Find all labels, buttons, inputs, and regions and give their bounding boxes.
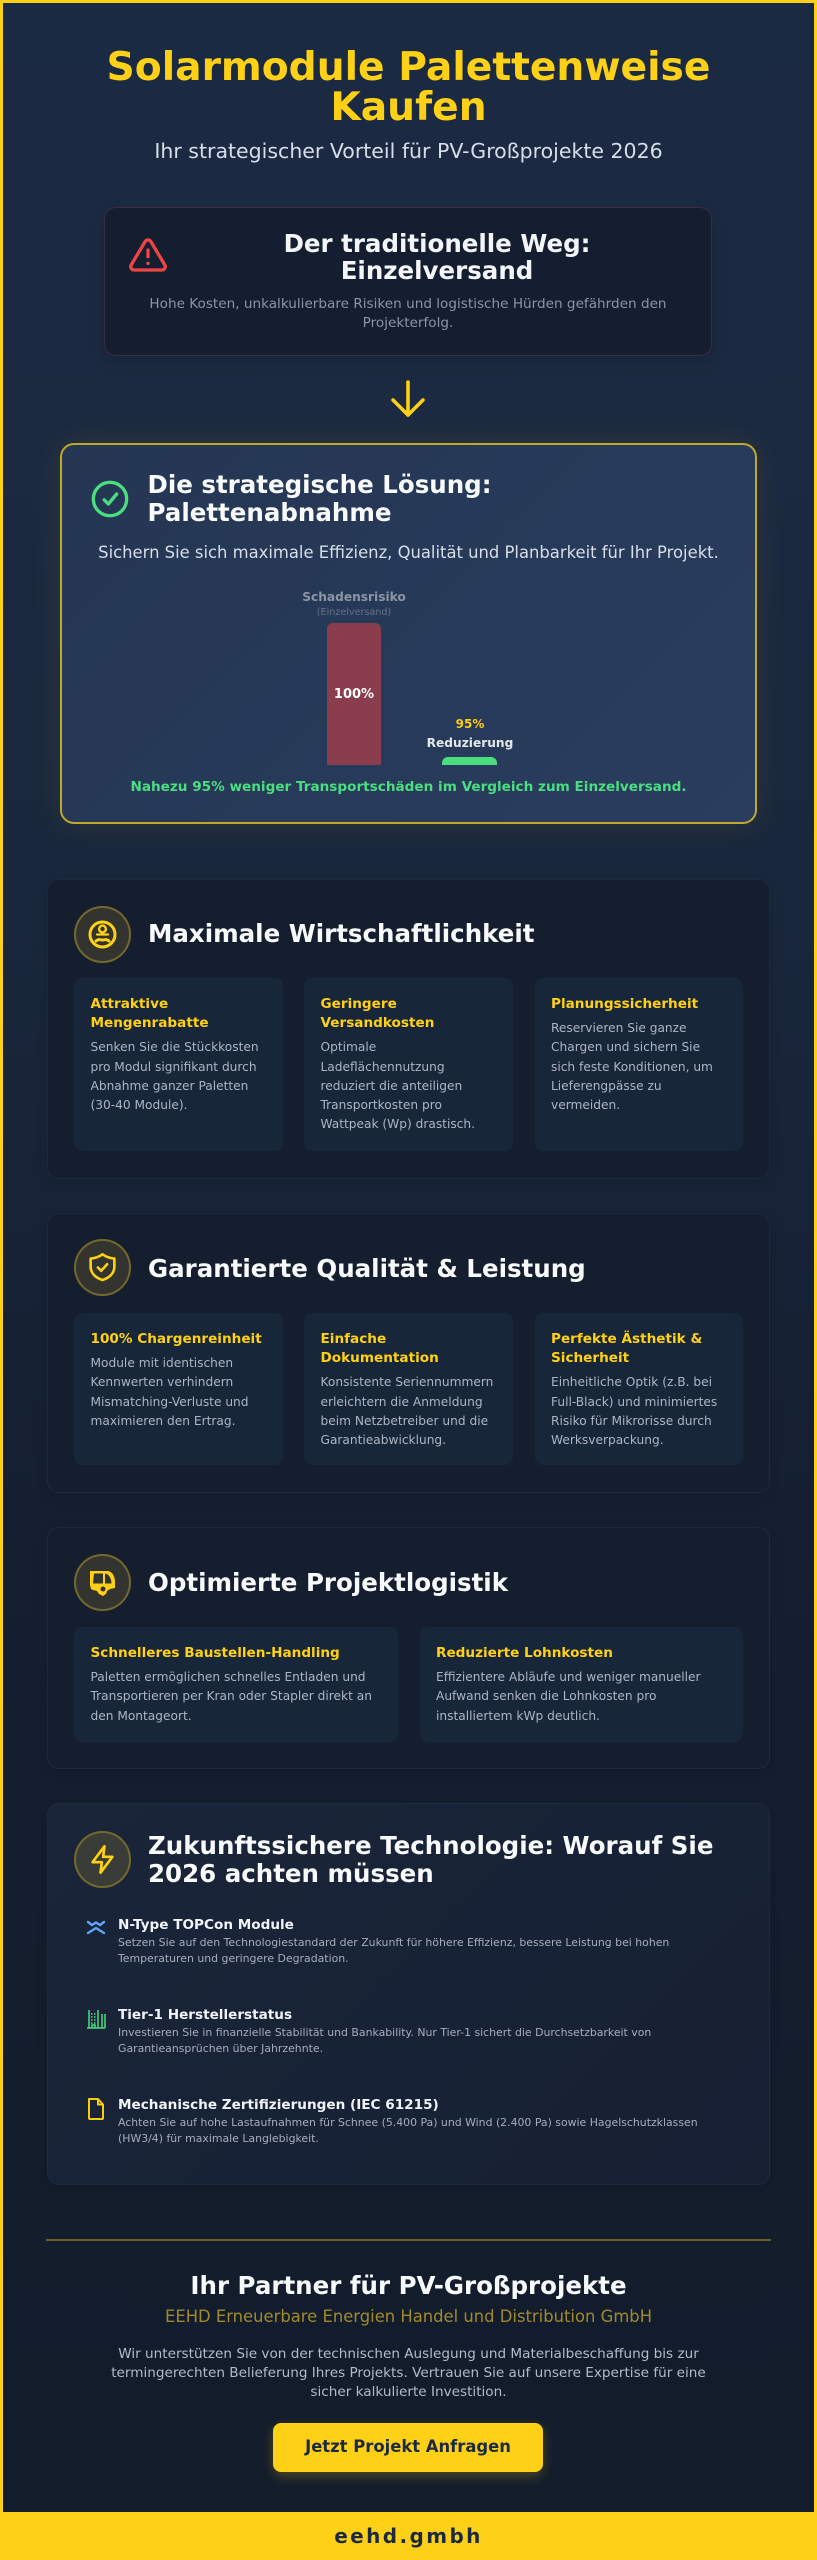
card: aesthetics and safety: Einheitliche Optik (z.B. bei [551, 1375, 712, 1389]
card: documentation: Einfache [320, 1330, 386, 1346]
title [107, 45, 710, 130]
heading: traditional way: Einzelversand [341, 256, 533, 285]
card: reduced labour costs: Reduzierte Lohnkosten [436, 1644, 613, 1660]
bar value: 100 percent: 100% [334, 687, 374, 702]
item: TOPCon [86, 1916, 669, 1965]
card: volume discounts: Attraktive [90, 996, 168, 1012]
panel: logistics [47, 1527, 770, 1769]
card: shipping costs: Ladeflächennutzung [320, 1060, 445, 1074]
text: traditional way description: Projekterfolg. [363, 315, 453, 331]
card: documentation: Dokumentation [320, 1350, 439, 1366]
card: volume discounts [74, 978, 283, 1151]
card: batch purity: Module mit identischen [90, 1356, 233, 1370]
card: reduced labour costs: Aufwand senken die Lohnkosten pro [436, 1689, 656, 1703]
card: volume discounts: (30-40 Module). [90, 1098, 188, 1112]
card: reduced labour costs: Effizientere Abläufe und weniger manueller [436, 1670, 701, 1684]
bar: reduced [442, 757, 497, 765]
text: partner description: termingerechten Belieferung Ihres Projekts. Vertrauen Sie auf unsere Expertise für eine [111, 2364, 706, 2380]
icon: chevrons [86, 1920, 106, 1934]
card: documentation: erleichtern die Anmeldung [320, 1394, 483, 1408]
item: TOPCon: N-Type TOPCon Module [118, 1916, 294, 1932]
card: aesthetics and safety: Werksverpackung. [551, 1433, 664, 1447]
item: tier 1: Investieren Sie in finanzielle Stabilität und Bankability. Nur Tier-1 sichert die Durchsetzbarkeit von [118, 2026, 651, 2039]
icon: document [88, 2098, 104, 2120]
text: company name: EEHD Erneuerbare Energien Handel und Distribution GmbH [165, 2307, 652, 2326]
card: volume discounts: Senken Sie die Stückkosten [90, 1040, 259, 1054]
heading: future technology: 2026 achten müssen [148, 1858, 434, 1888]
heading: quality: Garantierte Qualität & Leistung [148, 1254, 586, 1282]
icon: check circle [92, 480, 128, 518]
heading: future technology: Zukunftssichere Technologie: Worauf Sie [148, 1831, 713, 1860]
card: shipping costs: Optimale [320, 1040, 376, 1054]
item: certifications [88, 2096, 698, 2145]
card: planning security [534, 978, 743, 1151]
card: reduced labour costs [420, 1627, 743, 1742]
card: aesthetics and safety: Risiko für Mikrorisse durch [551, 1414, 712, 1428]
icon: truck [74, 1554, 131, 1611]
heading: partner: Ihr Partner für PV-Großprojekte [190, 2271, 627, 2300]
card: faster handling: den Montageort. [90, 1708, 192, 1722]
panel: future technology [47, 1803, 770, 2185]
text: traditional way description [149, 296, 667, 331]
item: certifications: Achten Sie auf hohe Lastaufnahmen für Schnee (5.400 Pa) und Wind (2.400 Pa) sowie Hagelschutzklassen [118, 2116, 698, 2129]
card: volume discounts: Mengenrabatte [90, 1015, 209, 1031]
heading: strategic solution: Palettenabnahme [148, 498, 391, 526]
card: aesthetics and safety: Full-Black) und minimiertes [551, 1394, 717, 1408]
card: documentation [304, 1313, 513, 1465]
card: aesthetics and safety [534, 1313, 743, 1465]
card: reduced labour costs: installiertem kWp deutlich. [436, 1708, 600, 1722]
card: shipping costs: Geringere [320, 996, 397, 1012]
icon: warning triangle [129, 238, 167, 272]
card: planning security: sich feste Konditionen, um [551, 1060, 713, 1074]
card: aesthetics and safety: Sicherheit [551, 1350, 629, 1366]
chart label: 95 percent: 95% [456, 717, 484, 731]
arrow: down [391, 380, 425, 417]
card: planning security: Reservieren Sie ganze [551, 1021, 687, 1035]
chart label: risk: Schadensrisiko [302, 590, 406, 604]
text: partner description: sicher kalkulierte Investition. [310, 2384, 507, 2400]
card: shipping costs [304, 978, 513, 1151]
card: batch purity: maximieren den Ertrag. [90, 1414, 235, 1428]
text: traditional way description: Hohe Kosten, unkalkulierbare Risiken und logistische Hürden gefährden den [149, 296, 667, 312]
heading: strategic solution: Die strategische Lösung: [148, 470, 492, 499]
icon: coins [74, 906, 131, 963]
panel: quality [47, 1212, 770, 1492]
card: batch purity: Mismatching-Verluste und [90, 1394, 249, 1408]
card: faster handling: Paletten ermöglichen schnelles Entladen und [90, 1670, 366, 1684]
item: TOPCon: Setzen Sie auf den Technologiestandard der Zukunft für höhere Effizienz, bessere Leistung bei hohen [118, 1936, 669, 1949]
card: aesthetics and safety: Perfekte Ästhetik & [551, 1330, 702, 1346]
item: certifications: (HW3/4) für maximale Langlebigkeit. [118, 2132, 319, 2145]
text: partner description [111, 2346, 706, 2400]
text: partner description: Wir unterstützen Sie von der technischen Auslegung und Materialbeschaffung bis zur [118, 2346, 699, 2362]
item: tier 1: Garantieansprüchen über Jahrzehnte. [118, 2042, 323, 2055]
card: faster handling [74, 1627, 398, 1742]
card: volume discounts: Abnahme ganzer Paletten [90, 1079, 248, 1093]
card: planning security: Lieferengpässe zu [551, 1079, 662, 1093]
card: shipping costs: reduziert die anteiligen [320, 1079, 462, 1093]
card: shipping costs: Wattpeak (Wp) drastisch. [320, 1117, 475, 1131]
footer bar: eehd.gmbh [334, 2524, 483, 2548]
card: planning security: vermeiden. [551, 1098, 620, 1112]
title: Solarmodule Palettenweise [107, 45, 710, 90]
title: Kaufen [330, 85, 487, 130]
card: documentation: beim Netzbetreiber und die [320, 1414, 488, 1428]
button: request project: Jetzt Projekt Anfragen [305, 2437, 511, 2456]
card: batch purity: Kennwerten verhindern [90, 1375, 233, 1389]
card: batch purity [74, 1313, 283, 1465]
heading: logistics: Optimierte Projektlogistik [148, 1568, 508, 1597]
subtitle: Ihr strategischer Vorteil für PV-Großprojekte 2026 [154, 139, 663, 163]
item: tier 1: Tier-1 Herstellerstatus [118, 2006, 292, 2022]
card: planning security: Chargen und sichern Sie [551, 1040, 700, 1054]
card: shipping costs: Transportkosten pro [320, 1098, 442, 1112]
card: documentation: Garantieabwicklung. [320, 1433, 446, 1447]
item: TOPCon: Temperaturen und geringere Degradation. [118, 1952, 349, 1965]
button: request project [273, 2423, 543, 2472]
chart sublabel: single shipping: (Einzelversand) [317, 607, 391, 618]
heading: strategic solution [148, 470, 492, 526]
card: documentation: Konsistente Seriennummern [320, 1375, 493, 1389]
heading: economy: Maximale Wirtschaftlichkeit [148, 918, 535, 948]
text: strategic solution description: Sichern Sie sich maximale Effizienz, Qualität und Planbarkeit für Ihr Projekt. [98, 543, 719, 562]
heading: future technology [148, 1831, 713, 1888]
footer bar [0, 2515, 817, 2560]
card: planning security: Planungssicherheit [551, 996, 698, 1012]
panel: strategic solution [60, 443, 757, 824]
card: shipping costs: Versandkosten [320, 1015, 434, 1031]
caption: damage reduction: Nahezu 95% weniger Transportschäden im Vergleich zum Einzelversand. [130, 779, 687, 795]
card: faster handling: Schnelleres Baustellen-Handling [90, 1644, 340, 1660]
card: batch purity: 100% Chargenreinheit [90, 1330, 262, 1346]
icon: lightning bolt [74, 1831, 131, 1888]
card: volume discounts: pro Modul signifikant durch [90, 1060, 257, 1074]
icon: building [87, 2010, 106, 2029]
item: tier 1 [87, 2006, 651, 2055]
chart label: reduction: Reduzierung [427, 736, 513, 750]
bar chart: damage risk [302, 590, 513, 765]
heading: traditional way: Der traditionelle Weg: [284, 228, 590, 258]
card: faster handling: Transportieren per Kran oder Stapler direkt an [90, 1689, 372, 1703]
bar: 100 percent [327, 623, 381, 765]
icon: shield check [74, 1239, 131, 1296]
panel: traditional way [104, 206, 712, 356]
panel: economy [47, 878, 770, 1178]
heading: traditional way [284, 228, 590, 285]
item: certifications: Mechanische Zertifizierungen (IEC 61215) [118, 2096, 439, 2112]
